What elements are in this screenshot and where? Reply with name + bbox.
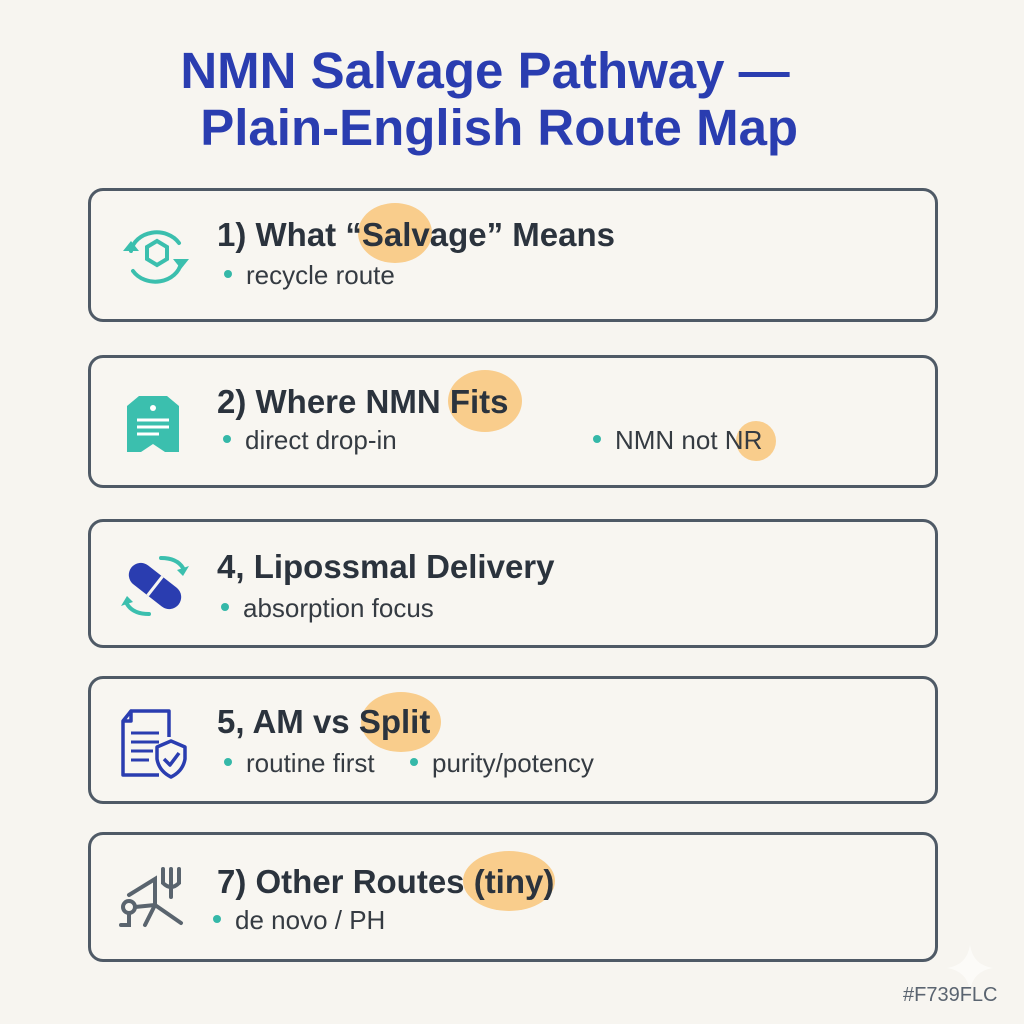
highlight: [463, 851, 555, 911]
icon: certificate: [127, 396, 179, 452]
heading: 4, Lipossmal Delivery: [217, 548, 554, 585]
panel: other routes: [88, 832, 938, 962]
bullet: absorption focus: [243, 593, 434, 623]
icon: recycle: [123, 230, 189, 284]
icon: routes: [119, 867, 184, 928]
panel: salvage: [88, 188, 938, 322]
panel: AM vs split: [88, 676, 938, 804]
highlight: [361, 692, 441, 752]
bullet: NMN not NR: [615, 425, 762, 455]
heading: 2) Where NMN Fits: [217, 383, 509, 420]
title: NMN Salvage Pathway —: [180, 42, 790, 99]
bullet: de novo / PH: [235, 905, 385, 935]
heading: 7) Other Routes (tiny): [217, 863, 554, 900]
highlight NR: [736, 421, 776, 461]
footer code: #F739FLC: [903, 984, 998, 1006]
icon: capsule: [121, 556, 189, 616]
heading: 1) What “Salvage” Means: [217, 216, 615, 253]
title: Plain-English Route Map: [200, 99, 798, 156]
bullet: recycle route: [246, 260, 395, 290]
highlight: [358, 203, 432, 263]
bullet: purity/potency: [432, 748, 594, 778]
heading: 5, AM vs Split: [217, 703, 430, 740]
bullet: direct drop-in: [245, 425, 397, 455]
icon: sparkle: [945, 943, 995, 993]
highlight: [448, 370, 522, 432]
panel: liposomal: [88, 519, 938, 648]
panel: where NMN fits: [88, 355, 938, 488]
icon: document shield: [121, 709, 187, 779]
title: [180, 42, 798, 156]
bullet: routine first: [246, 748, 375, 778]
